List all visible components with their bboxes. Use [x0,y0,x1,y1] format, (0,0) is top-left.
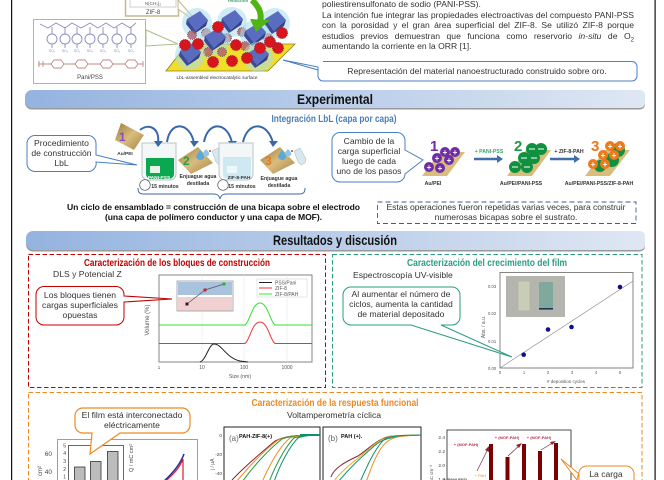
chart: bar chart of charge per bilayer [429,430,571,480]
step 3: Au/PEI/PANI-PSS/ZIF-8-PAH: + [603,160,608,169]
arrow: + PANI-PSS: + PANI-PSS [475,149,504,155]
chart: absorbance vs cycles: 0.01 [488,339,497,344]
callout: representación del material: Representación del material nanoestructurado construido sobre oro. [347,66,607,76]
chart: absorbance vs cycles: 0.00 [488,366,497,371]
panel: Pani/PSS structure: Pani/PSS [77,75,103,81]
chart: absorbance vs cycles: 1 [523,370,526,375]
chart: absorbance vs cycles: Abs. / a.u. [481,316,487,338]
panel: Pani/PSS structure: SO₃ [87,49,94,53]
panel: Pani/PSS structure: SO₃ [62,49,69,53]
panel: Pani/PSS structure: SO₃ [128,49,135,53]
step 1: Au/PEI: + [447,156,452,165]
text block: ciclo de ensamblado [67,202,360,222]
chart: DLS size distribution: 100 [240,365,248,371]
step 1: Au/PEI: + [453,148,458,157]
chart: absorbance vs cycles: 0 [499,370,502,375]
diagram: LbL beakers cycle [115,123,306,199]
arrow: + ZIF-8-PAH: + ZIF-8-PAH [554,149,584,155]
step 3: Au/PEI/PANI-PSS/ZIF-8-PAH: + [612,151,617,160]
heading: Experimental: Experimental [297,91,373,107]
inset bar chart: 2 [63,467,66,473]
inset bar chart: 3 [63,459,66,465]
brace [138,188,305,199]
heading: Resultados y discusión [26,231,645,252]
chart: CV PAH(+) [323,427,421,480]
icon: rinse 2: Enjuague agua [180,174,217,180]
chart: charge and CV: cm² [38,466,44,476]
callout: aumenta la cantidad: ciclos, aumenta la cantidad [349,299,453,309]
chart: CV PAH-ZIF-8(+): -20 [215,452,222,458]
chart: DLS size distribution: Volume (%) [145,304,151,336]
callout: procedimiento de construcción: LbL [54,158,69,168]
note: operaciones repetidas: numerosas bicapas sobre el sustrato. [435,212,577,222]
icon: rinse 3: 3 [265,154,272,168]
heading: Integración LbL: Integración LbL (capa por capa) [272,113,396,125]
note: operaciones repetidas [378,202,636,224]
inset bar chart: 4 [63,451,66,457]
inset bar chart: Q / mC cm² [129,444,135,472]
panel: bloques de construcción [28,254,326,388]
step 1: Au/PEI: Au/PEI [425,181,442,187]
icon: Au/PEI plate [115,123,144,157]
callout: cambio de la carga: carga superficial [338,146,400,156]
chart: charge and CV: 60 [45,451,52,458]
chart: bar chart of charge per bilayer: 2.4 [438,435,445,441]
step 2: Au/PEI/PANI-PSS [500,138,551,187]
step 1: Au/PEI: 1 [430,138,438,155]
icon: timers: 15 minutos [151,184,179,190]
panel: Pani/PSS structure: SO₃ [114,49,121,53]
callout: aumenta la cantidad [343,287,512,357]
icon: Au/PEI plate: 1 [119,130,126,144]
legend: ZIF-8 [275,286,287,292]
callout: procedimiento de construcción: Procedimiento [34,138,89,148]
panel: Pani/PSS structure: SO₃ [100,49,107,53]
icon: rinse 3: Enjuague agua [261,176,298,182]
step 1: Au/PEI: + [438,164,443,173]
callout: aumenta la cantidad: de material depositado [358,309,445,319]
panel: respuesta funcional [28,392,642,480]
callout: cambio de la carga: uno de los pasos [337,166,401,176]
subheading: Voltamperometría cíclica [287,410,381,420]
inset: potencial Z [177,281,233,311]
icon: Au/PEI plate: Au/PEI [117,151,133,157]
chart: CV PAH(+): PAH (+). [341,434,363,440]
illustration: LbL-assembled electrocatalytic surface: LbL-assembled electrocatalytic surface [176,75,258,80]
text block: introduction: La intención fue integrar las propiedades electroactivas del compuesto PANI-PSS [322,10,634,20]
callout: film interconectado [75,408,190,454]
legend [257,279,307,298]
icon: beaker PANI-PSS: PANI-PSS [148,175,171,181]
diagram: surface charge steps [422,138,633,187]
chart: charge and CV [38,440,198,480]
heading: Caracterización de los bloques de construcción [84,257,270,269]
callout: cambio de la carga: Cambio de la [344,136,395,146]
callout: cargas opuestas: Los bloques tienen [44,290,116,300]
callout: cargas opuestas: opuestas [63,310,97,320]
chart: bar chart of charge per bilayer: 2.0 [438,463,445,469]
icon: timers [140,180,256,190]
chart: absorbance vs cycles: 3 [571,370,574,375]
panel: Pani/PSS structure [34,20,178,84]
chart: DLS size distribution: 1000 [281,365,293,371]
text block: introduction: estudios previos demuestran que funciona como reservorio in-situ de O2 [322,30,634,43]
chart: DLS size distribution: Size (nm) [229,374,251,380]
chart: CV PAH-ZIF-8(+): PAH-ZIF-8(+) [239,434,272,440]
callout: cargas opuestas: cargas superficiales [42,300,118,310]
legend: PSS/Pani [275,280,296,286]
subheading: Espectroscopía UV-visible [353,270,453,280]
chart: CV PAH-ZIF-8(+): -40 [215,471,222,477]
icon: timers: 15 minutos [228,184,256,190]
icon: beaker PANI-PSS [142,143,176,181]
chart: bar chart of charge per bilayer: 2.2 [438,449,445,455]
chart: bar chart of charge per bilayer: + PAH [475,473,486,478]
step 3: Au/PEI/PANI-PSS/ZIF-8-PAH: + [591,160,596,169]
inset bar chart [63,444,135,480]
icon: rinse 2 [178,147,224,187]
chart: CV PAH-ZIF-8(+): 0 [219,433,222,439]
step 3: Au/PEI/PANI-PSS/ZIF-8-PAH: + [618,142,623,151]
inset bar chart: 5 [63,444,66,450]
step 3: Au/PEI/PANI-PSS/ZIF-8-PAH: 3 [591,138,599,155]
chart: absorbance vs cycles: 2 [547,370,550,375]
panel: Pani/PSS structure: SO₃ [49,49,56,53]
arrow heads [154,141,278,147]
chart: bar chart of charge per bilayer: + (MOF-PAH) [495,435,520,440]
icon: rinse 3 [260,147,306,189]
step 1: Au/PEI: + [427,163,432,172]
step 3: Au/PEI/PANI-PSS/ZIF-8-PAH: Au/PEI/PANI-PSS/ZIF-8-PAH [565,181,633,187]
panel: ZIF-8 structure: N(CH₃)₂ [145,1,161,6]
step 3: Au/PEI/PANI-PSS/ZIF-8-PAH: + [608,142,613,151]
text block: ciclo de ensamblado: Un ciclo de ensamblado = construcción de una bicapa sobre el electrodo [67,202,360,212]
icon: beaker ZIF-8-PAH: ZIF-8-PAH [228,175,251,181]
callout: la carga [561,459,634,480]
panel: Pani/PSS structure: SO₃ [74,49,81,53]
chart: absorbance vs cycles: 4 [595,370,598,375]
subheading: DLS y Potencial Z [53,269,122,279]
chart: bar chart of charge per bilayer: + (MOF-PAH) [454,442,479,447]
callout: procedimiento de construcción [27,136,137,172]
callout: la carga: La carga [589,469,623,479]
illustration: LbL-assembled electrocatalytic surface [166,0,295,80]
arrow: + PANI-PSS [474,149,504,163]
chart: charge and CV: 40 [45,469,52,476]
step 2: Au/PEI/PANI-PSS: 2 [514,138,522,155]
text block: ciclo de ensamblado: (una capa de polímero conductor y una capa de MOF). [105,212,322,222]
arrows: cycle steps [140,126,273,143]
arrow: + ZIF-8-PAH [550,149,584,163]
chart: DLS size distribution: 10 [199,365,205,371]
step 1: Au/PEI: + [443,148,448,157]
chart: DLS size distribution [145,275,312,380]
chart: bar chart of charge per bilayer: + (MOF-PAH) [527,435,552,440]
chart: absorbance vs cycles: 0.03 [488,284,497,289]
chart: CV PAH-ZIF-8(+): j / µA [210,458,216,471]
photo: films on glass [506,276,565,317]
heading: Resultados y discusión: Resultados y discusión [273,232,397,248]
panel: crecimiento del film [332,254,642,388]
step 2: Au/PEI/PANI-PSS: Au/PEI/PANI-PSS [500,181,543,187]
heading: Caracterización de la respuesta funcional [252,397,419,409]
callout: film interconectado: eléctricamente [104,420,160,430]
callout: aumenta la cantidad: Al aumentar el número de [352,289,451,299]
callout: procedimiento de construcción: de construcción [31,148,92,158]
chart: absorbance vs cycles: 0.02 [488,311,497,316]
callout: cambio de la carga [332,132,423,182]
chart: CV PAH-ZIF-8(+) [210,427,320,480]
icon: beaker ZIF-8-PAH [219,143,253,181]
chart: CV PAH(+): (b) [328,434,338,443]
text block: introduction: aumentando la corriente en la ORR [1]. [322,41,472,51]
chart: absorbance vs cycles: 5 [619,370,622,375]
step 1: Au/PEI [422,138,465,187]
step 3: Au/PEI/PANI-PSS/ZIF-8-PAH: + [601,151,606,160]
callout: film interconectado: El film está interconectado [82,410,183,420]
text block: introduction: con la porosidad y el gran área superficial del ZIF-8. Se utilizó ZIF-8 porque [322,20,634,30]
note: operaciones repetidas: Estas operaciones fueron repetidas varias veces, para construir [386,202,626,212]
callout: representación del material [283,60,637,81]
icon: rinse 2: 2 [183,154,190,168]
chart: DLS size distribution: 1 [158,365,161,370]
step 1: Au/PEI: + [435,154,440,163]
chart: absorbance vs cycles: # deposition cycles [547,379,586,384]
panel: ZIF-8 structure: ZIF-8 [146,10,161,16]
step 3: Au/PEI/PANI-PSS/ZIF-8-PAH [565,138,633,187]
chart: absorbance vs cycles [481,272,633,384]
legend: ZIF-8/PAH [275,292,299,298]
panel: ZIF-8 structure [126,0,198,23]
text block: introduction [322,0,634,51]
callout: cambio de la carga: luego de cada [342,156,396,166]
callout: cargas opuestas [36,286,172,325]
heading: Caracterización del crecimiento del film [407,257,567,269]
icon: rinse 3: destilada [268,183,290,189]
chart: CV PAH-ZIF-8(+): (a) [229,434,239,443]
heading: Experimental [25,90,645,110]
icon: rinse 2: destilada [187,181,209,187]
